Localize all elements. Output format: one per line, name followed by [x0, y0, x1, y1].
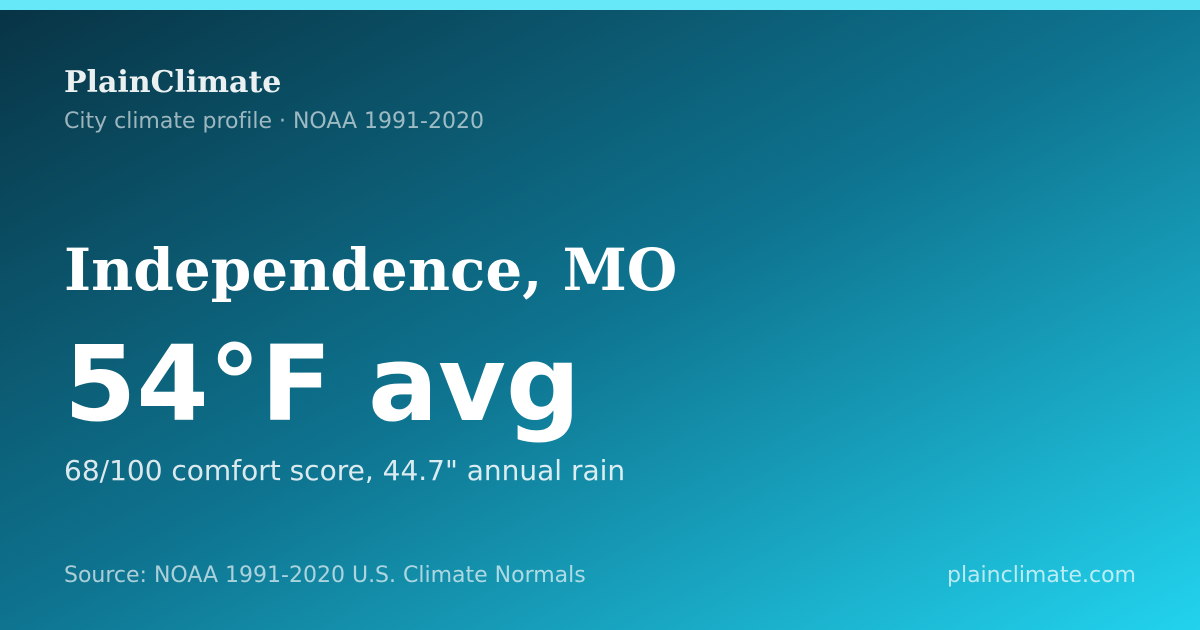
temperature headline: 54°F avg — [64, 323, 580, 445]
brand subtitle: City climate profile · NOAA 1991-2020 — [64, 109, 484, 134]
city heading: Independence, MO — [64, 236, 677, 304]
brand name: PlainClimate — [64, 65, 281, 100]
comfort and rain summary: 68/100 comfort score, 44.7" annual rain — [64, 454, 625, 487]
site url: plainclimate.com — [947, 563, 1136, 588]
top accent bar — [0, 0, 1200, 10]
source note: Source: NOAA 1991-2020 U.S. Climate Normals — [64, 563, 586, 588]
